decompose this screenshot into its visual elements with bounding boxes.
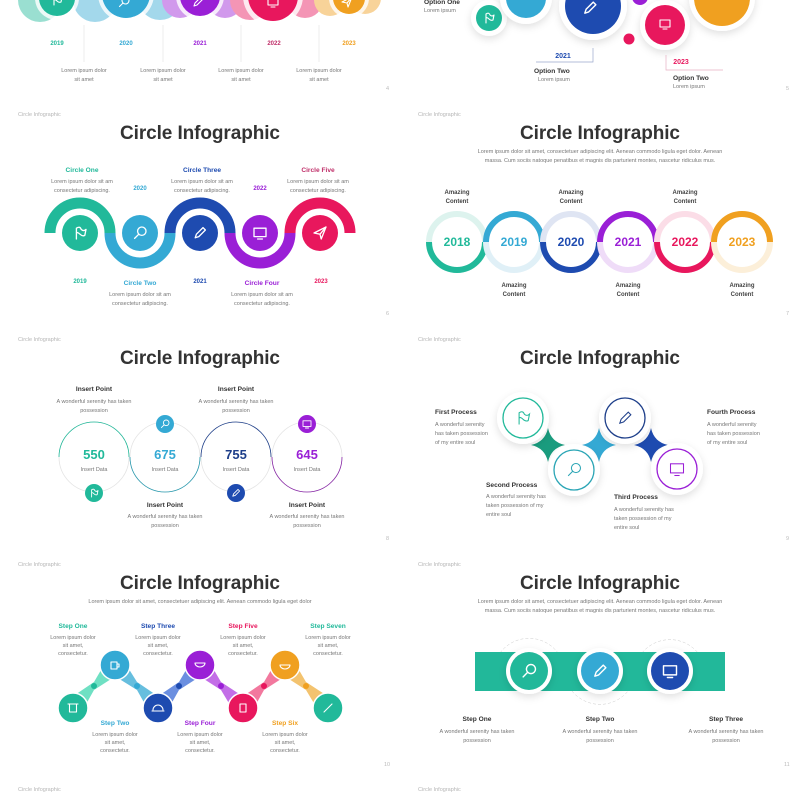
numbers: 645 (296, 447, 318, 462)
bottom labels: 2019 (73, 279, 87, 285)
slide 8: data circles: Circle Infographic (18, 337, 61, 343)
labels: possession (293, 523, 321, 529)
labels: Insert Point (289, 502, 326, 509)
slide 11: band steps (418, 562, 790, 768)
subtitle: Lorem ipsum dolor sit amet, consectetuer adipiscing elit. Aenean commodo ligula eget dolor (88, 599, 312, 605)
step labels: Lorem ipsum dolor (220, 635, 266, 641)
process labels: First Process (435, 409, 477, 416)
amazing content labels: Content (560, 199, 582, 205)
descriptions: sit amet (153, 77, 173, 83)
2023 callout: Lorem ipsum (673, 84, 705, 90)
subtitle (478, 599, 722, 614)
process labels: of my entire soul (707, 440, 747, 446)
step labels: Step One (463, 716, 492, 723)
step labels: consectetur. (228, 651, 258, 657)
slide 4: timeline (partial top-left) (18, 0, 389, 92)
amazing content labels: Content (731, 292, 753, 298)
option one text: Lorem ipsum (424, 8, 456, 14)
step labels: Step Two (101, 720, 129, 727)
circles (59, 422, 342, 492)
slide 8: data circles: 8 (386, 536, 389, 542)
step labels: Step Seven (310, 623, 346, 630)
years: 2023 (729, 235, 756, 249)
bottom labels: Circle Four (245, 280, 280, 287)
process labels: Second Process (486, 482, 538, 489)
step labels: consectetur. (100, 748, 130, 754)
slide 11: band steps: 11 (784, 762, 790, 768)
amazing content labels: Amazing (672, 190, 698, 196)
descriptions: Lorem ipsum dolor (61, 68, 107, 74)
small icons (85, 415, 316, 502)
step labels: Lorem ipsum dolor (135, 635, 181, 641)
process labels: A wonderful serenity (435, 422, 485, 428)
subtitle: massa. Cum sociis natoque penatibus et magnis dis parturient montes, nascetur ridiculus mus. (485, 158, 716, 164)
descriptions: Lorem ipsum dolor (140, 68, 186, 74)
blob background (18, 0, 381, 22)
step labels: A wonderful serenity has taken (563, 729, 637, 735)
years: 2018 (444, 235, 471, 249)
subtitle: Lorem ipsum dolor sit amet, consectetuer adipiscing elit. Aenean commodo ligula eget dolor. Aenean (478, 599, 722, 605)
step labels: Step Five (228, 623, 258, 630)
labels: possession (151, 523, 179, 529)
slide 6: wave circles: Circle Infographic (18, 112, 61, 118)
top labels: consectetur adipiscing. (54, 188, 110, 194)
labels: Insert Point (147, 502, 184, 509)
slide 5: bubble options (partial top-right): 5 (786, 86, 789, 92)
step labels: consectetur. (313, 651, 343, 657)
amazing content labels: Amazing (729, 283, 755, 289)
step labels: sit amet, (63, 643, 84, 649)
step labels: consectetur. (58, 651, 88, 657)
numbers (81, 447, 321, 473)
icon circles (35, 0, 369, 26)
top labels: Circle One (66, 167, 99, 174)
slide 5: bubble options (partial top-right) (424, 0, 789, 92)
years: 2019 (50, 41, 64, 47)
diamonds (531, 428, 668, 462)
2023 callout (666, 55, 723, 90)
years: 2021 (193, 41, 207, 47)
step labels: Step Three (709, 716, 743, 723)
subtitle: massa. Cum sociis natoque penatibus et magnis dis parturient montes, nascetur ridiculus mus. (485, 608, 716, 614)
slide 7: year rings: 7 (786, 311, 789, 317)
amazing content labels (444, 190, 755, 298)
years: 2020 (558, 235, 585, 249)
numbers: 675 (154, 447, 176, 462)
option one text (424, 0, 460, 14)
descriptions: Lorem ipsum dolor (218, 68, 264, 74)
step circles (506, 648, 693, 694)
2021 callout: 2021 (555, 53, 571, 60)
slide 10: seven steps: 10 (384, 762, 390, 768)
process labels: has taken possession (435, 431, 488, 437)
process labels: Third Process (614, 494, 658, 501)
numbers: Insert Data (152, 467, 179, 473)
amazing content labels: Content (503, 292, 525, 298)
bottom labels: 2023 (314, 279, 328, 285)
descriptions: sit amet (231, 77, 251, 83)
top labels: Lorem ipsum dolor sit am (171, 179, 233, 185)
amazing content labels: Amazing (615, 283, 641, 289)
step labels: Lorem ipsum dolor (177, 732, 223, 738)
labels: Insert Point (76, 386, 113, 393)
step labels: Lorem ipsum dolor (305, 635, 351, 641)
labels: A wonderful serenity has taken (199, 399, 273, 405)
step labels (50, 623, 351, 754)
step labels: sit amet, (275, 740, 296, 746)
slide 4: timeline (partial top-left): 4 (386, 86, 389, 92)
top labels: consectetur adipiscing. (174, 188, 230, 194)
process labels: has taken possession (707, 431, 760, 437)
step labels: Step Six (272, 720, 298, 727)
wave (50, 203, 350, 263)
band (475, 652, 725, 691)
slide 10: seven steps: Circle Infographic (18, 562, 61, 568)
subtitle (478, 149, 722, 164)
process circles (497, 392, 703, 496)
years: 2022 (672, 235, 699, 249)
slide 9: process circles (418, 337, 789, 542)
2023 callout: 2023 (673, 59, 689, 66)
bottom slide labels (18, 787, 461, 793)
step labels: possession (463, 738, 491, 744)
icon circles (62, 215, 338, 251)
step labels: possession (712, 738, 740, 744)
amazing content labels: Amazing (501, 283, 527, 289)
top labels (51, 167, 349, 194)
descriptions: sit amet (74, 77, 94, 83)
bottom labels: Lorem ipsum dolor sit am (109, 292, 171, 298)
bottom labels: consectetur adipiscing. (112, 301, 168, 307)
labels: A wonderful serenity has taken (57, 399, 131, 405)
numbers: 550 (83, 447, 105, 462)
bottom labels: consectetur adipiscing. (234, 301, 290, 307)
step labels: A wonderful serenity has taken (440, 729, 514, 735)
bottom labels: 2021 (193, 279, 207, 285)
step labels: Step Two (586, 716, 614, 723)
process labels: entire soul (614, 525, 639, 531)
labels: Insert Point (218, 386, 255, 393)
numbers: Insert Data (223, 467, 250, 473)
descriptions: Lorem ipsum dolor (296, 68, 342, 74)
descriptions: sit amet (309, 77, 329, 83)
slide 6: wave circles: 6 (386, 311, 389, 317)
title: Circle Infographic (120, 348, 280, 369)
slide 9: process circles: Circle Infographic (418, 337, 461, 343)
slide 10: seven steps (18, 562, 390, 768)
step labels: sit amet, (148, 643, 169, 649)
process labels (435, 409, 760, 531)
step labels: Lorem ipsum dolor (262, 732, 308, 738)
labels: possession (80, 408, 108, 414)
amazing content labels: Content (674, 199, 696, 205)
bubbles (471, 0, 755, 50)
title: Circle Infographic (520, 123, 680, 144)
rings (429, 214, 770, 270)
step labels: sit amet, (190, 740, 211, 746)
top labels: 2022 (253, 186, 267, 192)
connectors (66, 658, 335, 715)
step labels: consectetur. (143, 651, 173, 657)
labels (57, 386, 344, 529)
top labels: Lorem ipsum dolor sit am (287, 179, 349, 185)
numbers: Insert Data (81, 467, 108, 473)
step labels: consectetur. (185, 748, 215, 754)
step labels: consectetur. (270, 748, 300, 754)
title: Circle Infographic (120, 573, 280, 594)
process labels: of my entire soul (435, 440, 475, 446)
slide 6: wave circles (18, 112, 389, 317)
bottom labels: Circle Two (124, 280, 156, 287)
slide 8: data circles (18, 337, 389, 542)
amazing content labels: Amazing (558, 190, 584, 196)
years: 2021 (615, 235, 642, 249)
amazing content labels: Content (617, 292, 639, 298)
2021 callout: Lorem ipsum (538, 77, 570, 83)
bottom labels (73, 279, 328, 307)
slide 7: year rings (418, 112, 789, 317)
2021 callout (534, 48, 593, 83)
2021 callout: Option Two (534, 68, 570, 75)
slide 7: year rings: Circle Infographic (418, 112, 461, 118)
amazing content labels: Content (446, 199, 468, 205)
years: 2023 (342, 41, 356, 47)
slide 9: process circles: 9 (786, 536, 789, 542)
process labels: A wonderful serenity (707, 422, 757, 428)
step labels: Step Four (185, 720, 216, 727)
step labels: possession (586, 738, 614, 744)
process labels: taken possession of my (614, 516, 672, 522)
step labels: A wonderful serenity has taken (689, 729, 763, 735)
process labels: A wonderful serenity has (486, 494, 546, 500)
bottom slide labels: Circle Infographic (418, 787, 461, 793)
2023 callout: Option Two (673, 75, 709, 82)
top labels: 2020 (133, 186, 147, 192)
step circles (58, 650, 343, 723)
top labels: Lorem ipsum dolor sit am (51, 179, 113, 185)
title: Circle Infographic (520, 348, 680, 369)
step labels: Lorem ipsum dolor (92, 732, 138, 738)
title: Circle Infographic (520, 573, 680, 594)
step labels: sit amet, (318, 643, 339, 649)
labels: A wonderful serenity has taken (128, 514, 202, 520)
step labels: Step One (59, 623, 88, 630)
labels: A wonderful serenity has taken (270, 514, 344, 520)
numbers: 755 (225, 447, 247, 462)
process labels: Fourth Process (707, 409, 756, 416)
numbers: Insert Data (294, 467, 321, 473)
process labels: entire soul (486, 512, 511, 518)
top labels: consectetur adipiscing. (290, 188, 346, 194)
years (50, 41, 356, 47)
process labels: A wonderful serenity has (614, 507, 674, 513)
title: Circle Infographic (120, 123, 280, 144)
top labels: Circle Three (183, 167, 221, 174)
amazing content labels: Amazing (444, 190, 470, 196)
top labels: Circle Five (301, 167, 335, 174)
slide 11: band steps: Circle Infographic (418, 562, 461, 568)
descriptions (61, 68, 342, 83)
step labels: Lorem ipsum dolor (50, 635, 96, 641)
step labels: sit amet, (105, 740, 126, 746)
step labels (440, 716, 763, 744)
years: 2022 (267, 41, 281, 47)
years: 2019 (501, 235, 528, 249)
step labels: Step Three (141, 623, 175, 630)
subtitle: Lorem ipsum dolor sit amet, consectetuer adipiscing elit. Aenean commodo ligula eget dolor. Aenean (478, 149, 722, 155)
process labels: taken possession of my (486, 503, 544, 509)
years: 2020 (119, 41, 133, 47)
step labels: sit amet, (233, 643, 254, 649)
bottom slide labels: Circle Infographic (18, 787, 61, 793)
dashed arcs (500, 638, 698, 704)
bottom labels: Lorem ipsum dolor sit am (231, 292, 293, 298)
labels: possession (222, 408, 250, 414)
step icons (68, 662, 332, 712)
years (444, 235, 756, 249)
